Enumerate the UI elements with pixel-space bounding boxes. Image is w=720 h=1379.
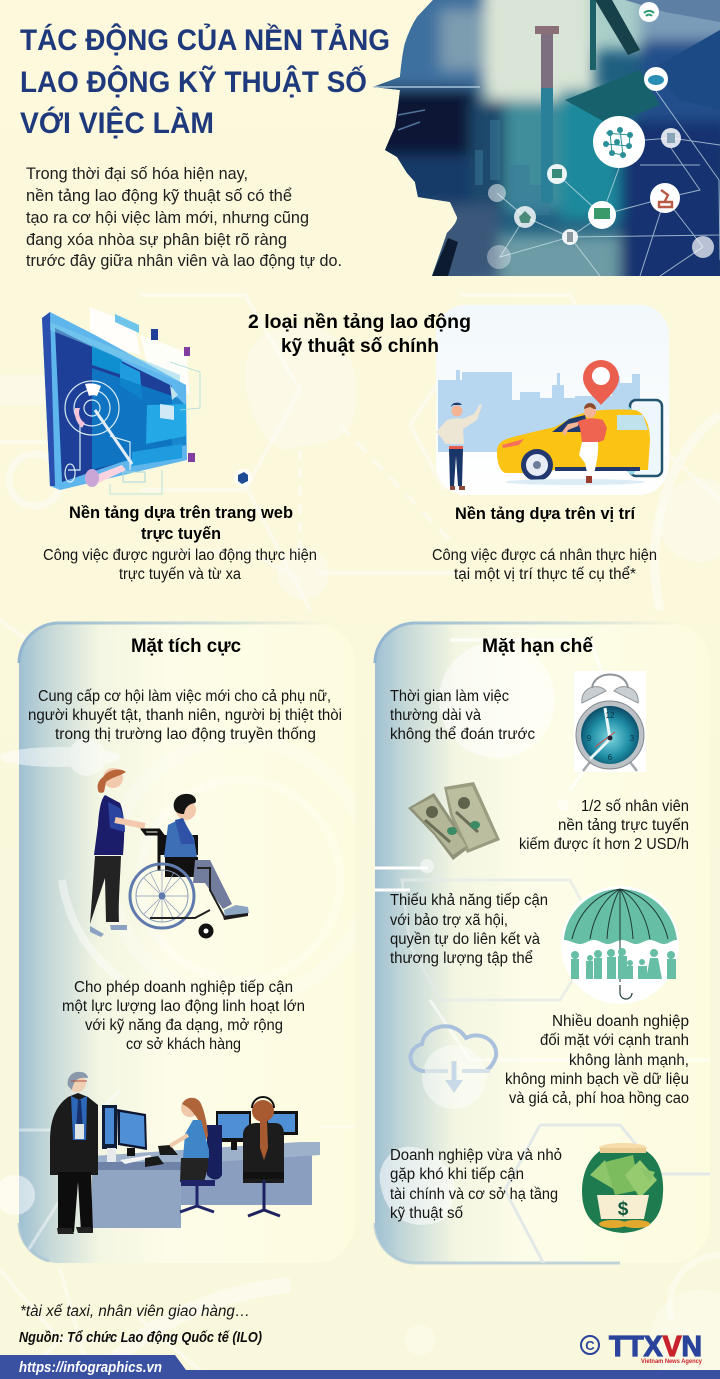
negative text 2: nền tảng trực tuyến [558, 817, 689, 834]
intro text: tạo ra cơ hội việc làm mới, nhưng cũng [26, 208, 309, 227]
icon: alarm clock: 12 [606, 711, 615, 720]
intro text: trước đây giữa nhân viên và lao động tự do. [26, 251, 342, 270]
positive text 1: Cung cấp cơ hội làm việc mới cho cả phụ nữ, [38, 688, 331, 705]
positive text 2: một lực lượng lao động linh hoạt lớn [62, 998, 305, 1015]
title: VỚI VIỆC LÀM [20, 106, 214, 140]
footer bar with url [0, 1355, 720, 1379]
icon: money jar [582, 1143, 663, 1233]
positive text 2: Cho phép doanh nghiệp tiếp cận [74, 979, 293, 996]
negative text 1: không thể đoán trước [390, 726, 535, 743]
icon: money jar: $ [618, 1199, 629, 1220]
logo: TTXVN: TTXVN [609, 1331, 702, 1363]
illustration: call centre office [50, 1072, 320, 1234]
negative text 5: kỹ thuật số [390, 1205, 463, 1222]
negative heading: Mặt hạn chế [482, 635, 593, 657]
title [20, 23, 390, 140]
negative text 4 [505, 1013, 689, 1107]
man leaning on car [562, 403, 607, 483]
negative text 3: thương lượng tập thể [390, 950, 533, 967]
negative text 3 [390, 892, 548, 967]
location platform caption: Nền tảng dựa trên vị trí [455, 505, 636, 523]
icon: cloud download [411, 1026, 496, 1109]
header photo: worker silhouette with digital network [360, 0, 720, 295]
panel: negative side [375, 623, 720, 1266]
negative text 1 [390, 688, 535, 743]
footer bar with url: https://infographics.vn [19, 1359, 162, 1376]
icon: alarm clock: 3 [630, 734, 635, 743]
negative text 5: Doanh nghiệp vừa và nhỏ [390, 1147, 562, 1164]
negative text 4: đối mặt với cạnh tranh [540, 1032, 689, 1049]
illustration: nurse pushing wheelchair [90, 768, 249, 938]
positive text 2 [62, 979, 305, 1053]
intro text [26, 164, 342, 270]
negative text 3: quyền tự do liên kết và [390, 931, 540, 948]
positive text 1: trong thị trường lao động truyền thống [55, 726, 316, 743]
negative text 4: và giá cả, phí hoa hồng cao [509, 1090, 689, 1107]
icon: alarm clock [574, 671, 646, 772]
location platform caption [432, 505, 657, 583]
illustration: web platform screen [42, 307, 252, 494]
negative text 2: 1/2 số nhân viên [581, 798, 689, 815]
negative text 4: không minh bạch về dữ liệu [505, 1071, 689, 1088]
negative text 2 [519, 798, 689, 853]
intro text: đang xóa nhòa sự phân biệt rõ ràng [26, 230, 287, 249]
location platform caption: Công việc được cá nhân thực hiện [432, 547, 657, 564]
title: TÁC ĐỘNG CỦA NỀN TẢNG [20, 23, 390, 57]
woman from behind [243, 1097, 284, 1216]
intro text: Trong thời đại số hóa hiện nay, [26, 164, 248, 183]
seated woman [170, 1098, 222, 1212]
negative text 5: tài chính và cơ sở hạ tầng [390, 1186, 558, 1203]
icon: dollar bills [408, 782, 500, 860]
negative text 5: gặp khó khi tiếp cận [390, 1166, 524, 1183]
positive text 2: cơ sở khách hàng [126, 1036, 241, 1053]
man waving [436, 403, 482, 490]
logo: TTXVN: C [585, 1338, 595, 1353]
web platform caption [43, 504, 317, 583]
negative text 1: thường dài và [390, 707, 481, 724]
heading: two platform types: kỹ thuật số chính [281, 335, 439, 357]
panel: positive side [0, 623, 370, 1263]
icon: alarm clock: 6 [608, 753, 613, 762]
logo: TTXVN: Vietnam News Agency [641, 1359, 703, 1365]
icon: alarm clock: 9 [587, 734, 592, 743]
location platform caption: tại một vị trí thực tế cụ thể* [454, 566, 636, 583]
footnote: *tài xế taxi, nhân viên giao hàng… [20, 1303, 250, 1320]
negative text 2: kiếm được ít hơn 2 USD/h [519, 836, 689, 853]
web platform caption: trực tuyến và từ xa [119, 566, 241, 583]
title: LAO ĐỘNG KỸ THUẬT SỐ [20, 65, 367, 99]
web platform caption: trực tuyến [141, 525, 221, 543]
negative text 3: Thiếu khả năng tiếp cận [390, 892, 548, 909]
heading: two platform types: 2 loại nền tảng lao động [248, 311, 471, 333]
negative text 3: với bảo trợ xã hội, [390, 912, 508, 929]
positive heading: Mặt tích cực [131, 635, 241, 657]
web platform caption: Công việc được người lao động thực hiện [43, 547, 317, 564]
negative text 1: Thời gian làm việc [390, 688, 509, 705]
source: Nguồn: Tổ chức Lao động Quốc tế (ILO) [19, 1329, 262, 1346]
positive text 1 [28, 688, 342, 743]
negative text 4: không lành mạnh, [569, 1052, 689, 1069]
negative text 4: Nhiều doanh nghiệp [552, 1013, 689, 1030]
manager [50, 1072, 98, 1234]
icon: umbrella protecting people [561, 886, 679, 1004]
negative text 5 [390, 1147, 562, 1222]
heading: two platform types [248, 311, 471, 357]
positive text 1: người khuyết tật, thanh niên, người bị thiệt thòi [28, 707, 342, 724]
web platform caption: Nền tảng dựa trên trang web [69, 504, 293, 522]
illustration: location platform card with car [436, 305, 669, 495]
positive text 2: với kỹ năng đa dạng, mở rộng [85, 1017, 283, 1034]
intro text: nền tảng lao động kỹ thuật số có thể [26, 186, 292, 205]
